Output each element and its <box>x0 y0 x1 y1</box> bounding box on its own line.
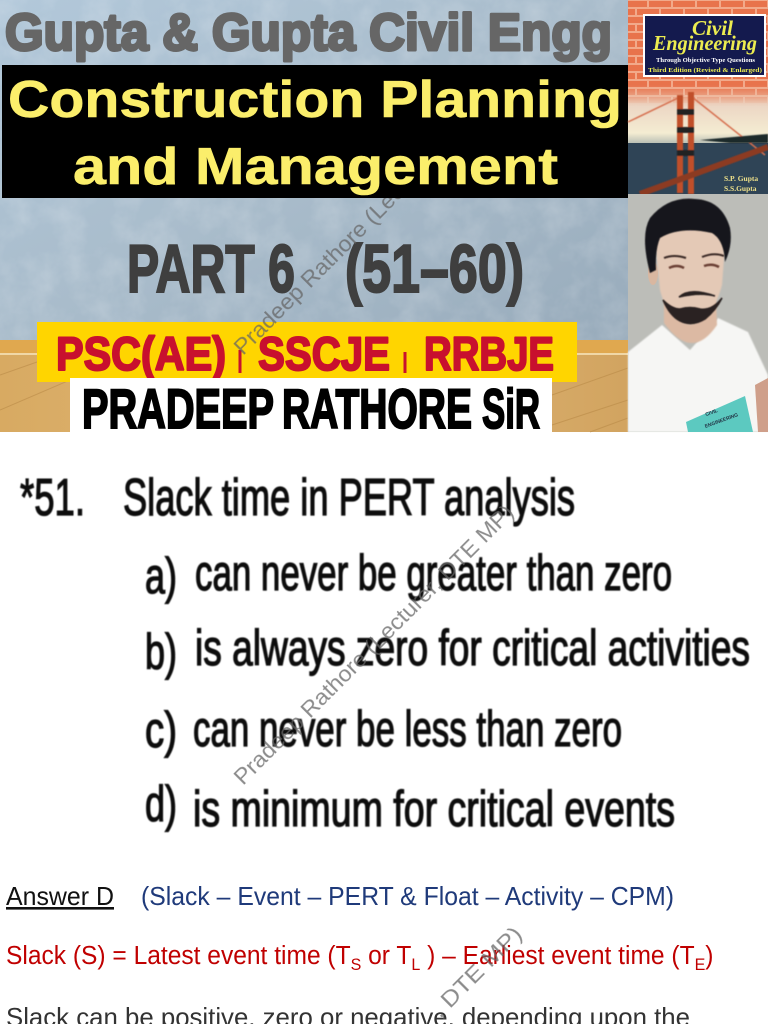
book title plate: Through Objective Type Questions <box>656 57 755 64</box>
book title plate: Third Edition (Revised & Enlarged) <box>648 67 762 74</box>
hand at edge <box>755 378 768 432</box>
series title: Gupta & Gupta Civil Engg <box>5 4 612 62</box>
bay water <box>628 143 768 194</box>
presenter photo <box>628 194 768 432</box>
question stem <box>20 469 575 527</box>
title block <box>2 65 628 198</box>
slack formula: or T <box>361 941 411 970</box>
question 51 scan <box>20 469 750 837</box>
option b: b) <box>145 624 177 680</box>
hair <box>645 199 731 273</box>
authors <box>724 174 758 193</box>
book title plate: Engineering <box>652 31 757 55</box>
presenter name: RATHORE <box>282 377 472 440</box>
option a: a) <box>145 548 177 604</box>
exams strip: PSC(AE) <box>56 327 226 380</box>
eyes and brows <box>664 254 724 268</box>
sky fade <box>628 85 768 145</box>
slack formula: ) <box>705 941 713 970</box>
watermark middle: Pradeep Rathore (Lecturer, DTE MP) <box>229 500 519 790</box>
answer label: Answer D <box>6 881 114 911</box>
presenter name: SiR <box>482 377 540 440</box>
wood floor <box>0 340 628 432</box>
option d: d) <box>145 776 177 832</box>
slack versus float note: (Slack – Event – PERT & Float – Activity – CPM) <box>141 881 674 911</box>
golden gate bridge <box>628 92 768 194</box>
title block: Construction Planning <box>8 71 622 129</box>
slack formula: L <box>411 955 420 974</box>
presenter name <box>70 377 552 440</box>
book title plate <box>643 14 766 77</box>
t-shirt badge: CIVIL <box>705 408 719 418</box>
authors: S.S.Gupta <box>724 184 757 193</box>
part heading <box>127 231 524 307</box>
slack formula: Slack (S) = Latest event time (T <box>6 941 351 970</box>
beard and moustache <box>663 292 722 324</box>
photo backdrop <box>628 194 768 432</box>
exams strip <box>37 322 577 382</box>
t-shirt badge <box>686 396 753 432</box>
header banner <box>0 0 628 440</box>
book cover <box>628 0 768 194</box>
slack formula: E <box>695 955 705 974</box>
t-shirt <box>628 318 768 432</box>
watermark bottom: , DTE MP) <box>426 921 527 1023</box>
book title plate: Civil <box>692 16 733 40</box>
exams strip: SSCJE <box>258 327 390 380</box>
slack formula: ) – Earliest event time (T <box>420 941 695 970</box>
question stem: *51. <box>20 469 85 527</box>
question stem: Slack time in PERT analysis <box>123 469 575 527</box>
neck <box>664 300 717 343</box>
ear <box>648 261 658 285</box>
wall background <box>0 0 628 340</box>
presenter name: PRADEEP <box>82 377 274 440</box>
slack formula: S <box>351 955 361 974</box>
answer line <box>6 881 674 911</box>
part heading: PART 6 <box>127 231 295 307</box>
option c: c) <box>145 702 177 758</box>
t-shirt badge: ENGINEERING <box>704 412 739 430</box>
brick background <box>628 0 768 194</box>
exams strip: RRBJE <box>424 327 554 380</box>
watermarks <box>233 198 522 1020</box>
face <box>655 222 725 325</box>
title block: and Management <box>73 138 558 196</box>
part heading: (51–60) <box>345 231 524 307</box>
option c <box>145 701 622 758</box>
watermark top: Pradeep Rathore (Lecturer, DTE MP) <box>229 70 519 360</box>
authors: S.P. Gupta <box>724 174 758 183</box>
